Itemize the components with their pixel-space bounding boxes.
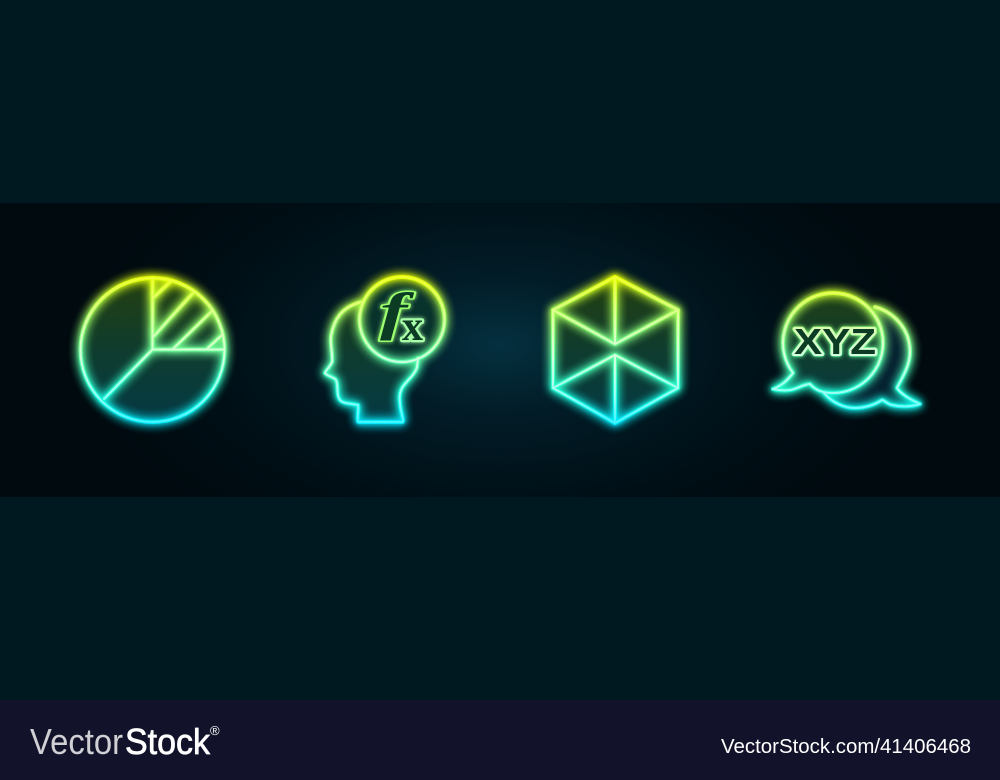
fx formula symbol: f: [380, 281, 414, 341]
footer logo: ®: [210, 723, 220, 738]
fx formula symbol: x: [402, 304, 423, 350]
fx formula symbol: x: [402, 304, 423, 350]
icon: pie chart: [80, 278, 224, 422]
XYZ letters: XYZ: [794, 321, 876, 362]
icon: hexagonal cube: [553, 277, 678, 423]
footer logo: [30, 721, 220, 762]
footer logo: Stock: [125, 721, 211, 762]
dark central band: [0, 203, 1000, 497]
footer image id: VectorStock.com/41406468: [721, 736, 971, 758]
XYZ letters: XYZ: [794, 321, 876, 362]
icon: head with fx bubble: [325, 277, 444, 422]
footer bar: [0, 700, 1000, 780]
icon: XYZ speech bubbles: [773, 293, 920, 408]
XYZ letters: XYZ: [794, 321, 876, 362]
footer logo: Vector: [30, 721, 123, 762]
fx formula symbol: f: [380, 281, 414, 341]
fx formula symbol: [380, 281, 423, 350]
